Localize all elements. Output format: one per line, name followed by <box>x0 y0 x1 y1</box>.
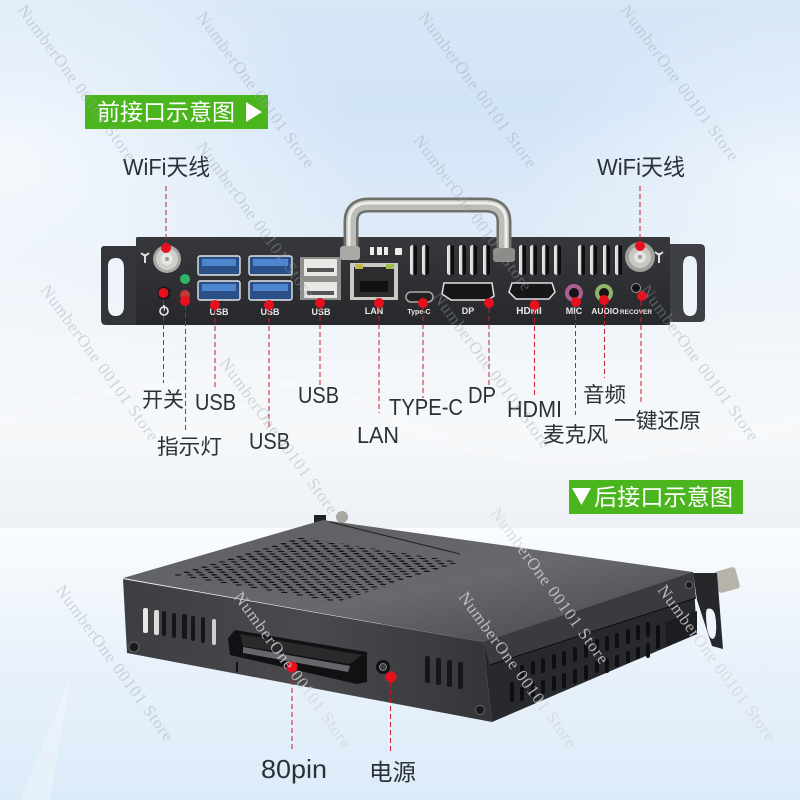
right mounting bracket <box>668 244 705 322</box>
panel silkscreen labels: USB <box>311 307 331 317</box>
panel silkscreen labels: MIC <box>566 306 583 316</box>
label: LAN: LAN <box>357 422 399 448</box>
callout lines and dots: front ports <box>158 186 647 433</box>
USB 2.0 ports <box>300 257 341 300</box>
watermarks: NumberOne 00101 Store <box>52 581 178 744</box>
screws <box>129 582 692 714</box>
panel silkscreen labels: LAN <box>365 306 383 316</box>
USB 3.0 ports <box>198 256 292 300</box>
watermarks: NumberOne 00101 Store <box>415 8 541 171</box>
left face vent slots <box>143 608 463 689</box>
watermarks: NumberOne 00101 Store <box>487 504 613 667</box>
label: left WiFi antenna: WiFi天线 <box>123 154 210 180</box>
left mounting bracket <box>101 246 138 325</box>
vent slots <box>410 245 622 275</box>
antenna stub behind <box>314 511 348 524</box>
panel silkscreen labels: DP <box>462 306 474 316</box>
watermarks: NumberOne 00101 Store <box>637 281 763 444</box>
handle <box>340 203 515 262</box>
label: USB 2: USB <box>249 428 290 454</box>
panel silkscreen labels: USB <box>260 307 280 317</box>
label: power switch: 开关 <box>142 389 184 412</box>
panel silkscreen labels: Type-C <box>407 309 431 316</box>
watermarks: NumberOne 00101 Store <box>410 131 536 294</box>
heading: front ports: 前接口示意图 <box>97 99 235 125</box>
callout: 80pin <box>286 662 298 750</box>
panel silkscreen labels: USB <box>209 307 229 317</box>
label: microphone: 麦克风 <box>543 424 608 447</box>
watermarks: NumberOne 00101 Store <box>617 1 743 164</box>
front view device <box>101 203 705 325</box>
watermarks: NumberOne 00101 Store <box>230 588 356 751</box>
panel silkscreen labels: HDMI <box>516 306 542 317</box>
LAN port <box>350 263 398 300</box>
label: HDMI: HDMI <box>507 396 562 422</box>
left face <box>123 579 492 722</box>
panel silkscreen labels: AUDIO <box>591 306 619 316</box>
antenna connectors <box>141 242 663 273</box>
watermarks: NumberOne 00101 Store <box>193 8 319 171</box>
label: 80pin: 80pin <box>261 754 327 784</box>
label: USB 1: USB <box>195 389 236 415</box>
audio jacks <box>565 284 640 302</box>
right face vent slots <box>510 611 697 702</box>
80pin edge connector <box>228 630 367 684</box>
label: right WiFi antenna: WiFi天线 <box>597 154 685 180</box>
label: one-key restore: 一键还原 <box>614 410 701 433</box>
watermarks: NumberOne 00101 Store <box>14 1 140 164</box>
label: audio: 音频 <box>583 384 626 407</box>
label: Type-C: TYPE-C <box>389 394 463 420</box>
power button and LEDs <box>158 274 190 315</box>
top face <box>123 520 693 642</box>
heading: rear ports: 后接口示意图 <box>594 484 733 510</box>
label: power: 电源 <box>369 759 416 785</box>
panel silkscreen labels <box>209 306 652 317</box>
label: indicator light: 指示灯 <box>157 436 222 459</box>
power jack <box>376 660 390 674</box>
heading: front ports <box>85 95 268 129</box>
lock and status marks <box>370 247 402 255</box>
watermarks: NumberOne 00101 Store <box>654 581 780 744</box>
DP port <box>442 283 494 300</box>
panel silkscreen labels: RECOVER <box>620 309 652 316</box>
callout: power jack <box>386 672 396 752</box>
Type-C port <box>406 292 433 302</box>
watermarks: NumberOne 00101 Store <box>455 588 581 751</box>
front panel <box>136 237 670 325</box>
perforated vent <box>174 538 456 600</box>
HDMI port <box>509 283 555 299</box>
heading: rear ports <box>569 480 743 514</box>
label: USB 3: USB <box>298 382 339 408</box>
label: DP: DP <box>468 382 496 408</box>
watermarks: NumberOne 00101 Store <box>37 281 163 444</box>
rear view device <box>123 511 740 722</box>
watermarks: NumberOne 00101 Store <box>193 138 319 301</box>
right face <box>483 572 697 722</box>
watermarks: NumberOne 00101 Store <box>216 354 342 517</box>
watermarks: NumberOne 00101 Store <box>429 288 555 451</box>
right bracket and knob <box>693 567 740 649</box>
